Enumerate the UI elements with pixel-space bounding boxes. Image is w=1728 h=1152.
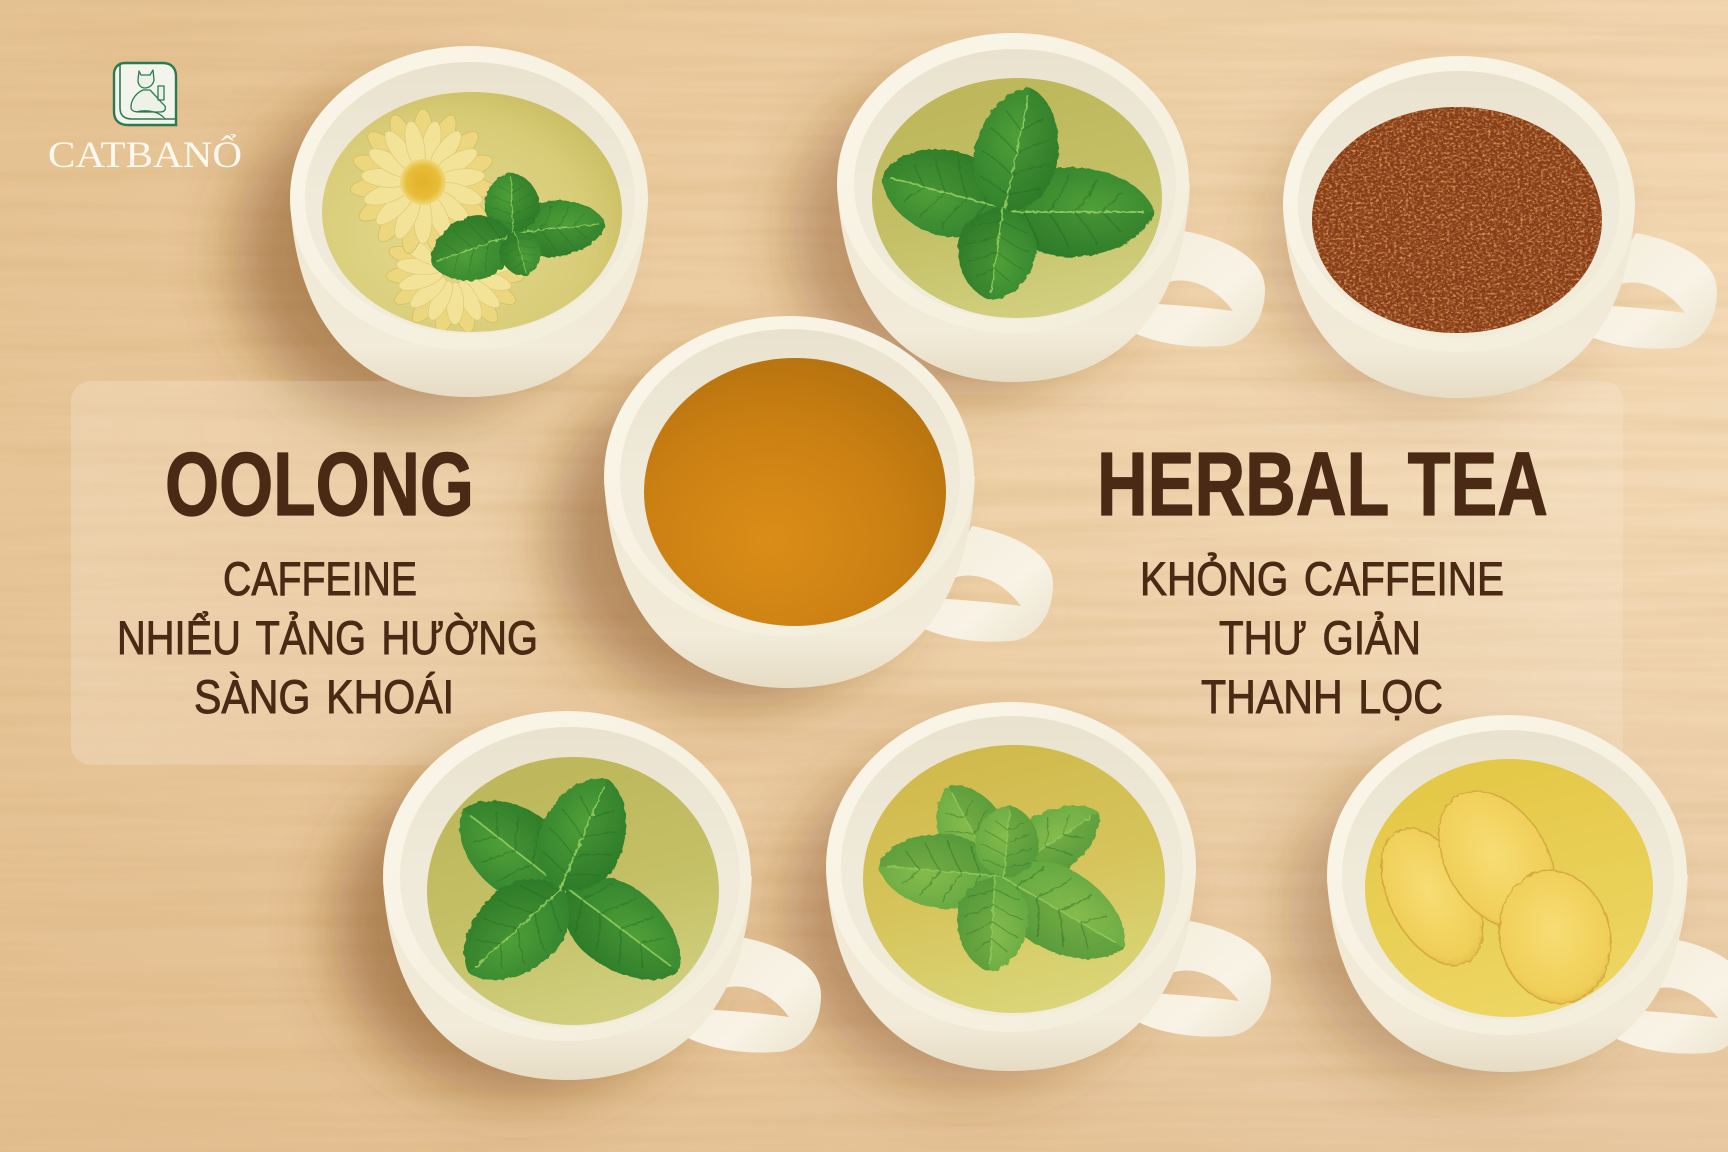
mint sprig	[437, 763, 702, 1004]
cup shadows on table	[235, 75, 1640, 1095]
heading: herbal tea: HERBAL TEA	[1097, 435, 1548, 535]
cup: ginger tea	[1327, 715, 1728, 1072]
cup: light mint tea bottom centre	[826, 702, 1271, 1071]
text block: herbal tea qualities: THANH LỌC	[1201, 670, 1443, 723]
text block: oolong qualities: CAFFEINE	[223, 552, 417, 605]
chrysanthemum flowers	[349, 109, 525, 335]
mint sprig	[876, 771, 1144, 983]
cup: oolong amber tea centre	[604, 316, 1053, 688]
cup: mint tea top centre	[837, 33, 1265, 382]
cup: mint tea bottom left	[383, 711, 821, 1080]
tea liquid: pale yellow	[322, 92, 622, 332]
text block: oolong qualities: NHIỂU TẢNG HƯỜNG	[117, 611, 538, 664]
tea liquid: green	[872, 78, 1162, 318]
tea liquid: green	[427, 757, 719, 1025]
tea liquid: yellow green	[863, 745, 1165, 1013]
icon: cat badge	[114, 63, 176, 125]
heading: oolong: OOLONG	[165, 435, 474, 535]
mint sprig	[872, 79, 1154, 305]
logo: catbano	[48, 63, 242, 176]
cup: chrysanthemum and mint tea	[290, 46, 648, 397]
ginger slices	[1360, 770, 1625, 1015]
text block: oolong qualities	[117, 552, 538, 723]
text block: oolong qualities: SÀNG KHOÁI	[194, 670, 454, 723]
text block: herbal tea qualities	[1140, 552, 1504, 723]
tea liquid: golden	[1365, 759, 1653, 1017]
panel: oolong backdrop	[71, 381, 591, 765]
rooibos leaves	[1312, 107, 1602, 333]
mint sprig	[421, 172, 608, 293]
text block: herbal tea qualities: KHỎNG CAFFEINE	[1140, 552, 1504, 605]
panel: herbal tea backdrop	[1040, 381, 1623, 765]
logo: catbano: CATBANỔ	[48, 133, 242, 176]
tea liquid: amber	[644, 358, 946, 626]
text block: herbal tea qualities: THƯ GIẢN	[1219, 611, 1421, 664]
cup: rooibos dry leaves	[1283, 56, 1717, 398]
